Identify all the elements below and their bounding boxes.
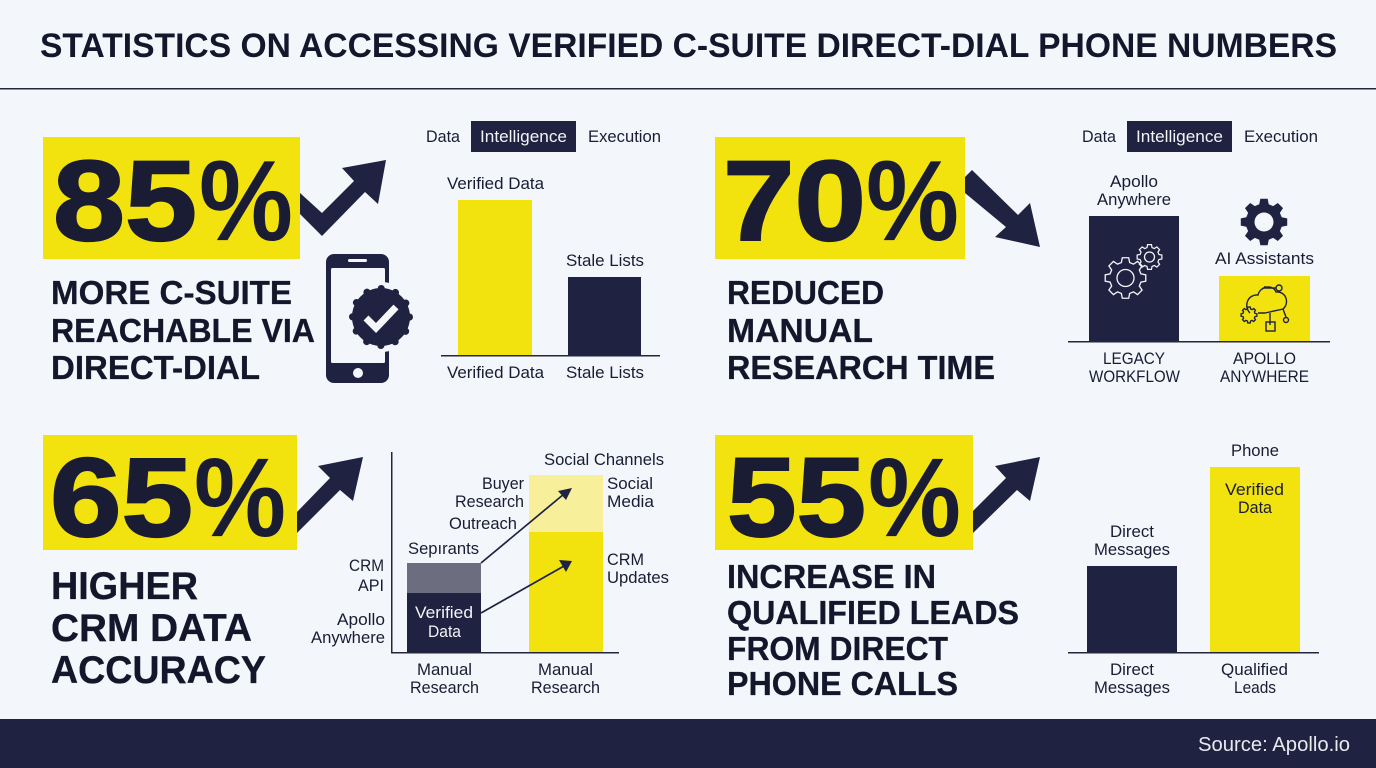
stat: 55%	[715, 435, 973, 560]
stat: 70%	[715, 137, 965, 265]
tabs: data intelligence execution	[426, 121, 661, 152]
tabs: data intelligence execution	[1082, 121, 1318, 152]
panel: 65% higher CRM data accuracy	[43, 435, 669, 697]
heading: more C-suite reachable: MORE C-SUITE	[51, 274, 292, 311]
stat: 55%: 55	[727, 435, 866, 560]
stacked bar chart: manual research comparison: Social Channels	[544, 450, 664, 469]
bar chart: direct messages vs phone: Messages	[1094, 540, 1170, 559]
bar chart: direct messages vs phone: Messages	[1094, 678, 1170, 697]
arrow: to social media	[481, 488, 572, 563]
stacked bar chart: manual research comparison: Manual	[417, 660, 472, 679]
stacked bar chart: manual research comparison	[311, 450, 669, 697]
stat: 65%: 65	[50, 435, 193, 560]
tabs: data intelligence execution: Data	[1082, 127, 1117, 146]
stacked bar chart: manual research comparison: Data	[428, 622, 461, 641]
stacked bar chart: manual research comparison: Research	[410, 678, 479, 697]
bar chart: verified data vs stale lists: Verified Data	[447, 363, 545, 382]
stacked bar chart: manual research comparison: CRM	[607, 550, 644, 569]
stacked bar chart: manual research comparison: Research	[455, 492, 524, 511]
stat: 85%	[43, 137, 300, 265]
stat: 70%: %	[866, 138, 959, 265]
bar chart: direct messages vs phone: Leads	[1234, 678, 1276, 697]
title: STATISTICS ON ACCESSING VERIFIED C-SUITE DIRECT-DIAL PHONE NUMBERS	[40, 27, 1337, 65]
stacked bar chart: manual research comparison: Outreach	[449, 514, 517, 533]
tabs: data intelligence execution: Intelligence	[480, 127, 567, 146]
stacked bar chart: manual research comparison: Research	[531, 678, 600, 697]
arrow: up trend	[300, 160, 386, 236]
stacked bar chart: manual research comparison: Media	[607, 492, 655, 511]
bar chart: direct messages vs phone: Verified	[1225, 480, 1284, 499]
bar chart: verified data vs stale lists: Stale Lists	[566, 363, 644, 382]
arrow: up	[973, 457, 1040, 533]
stacked bar chart: manual research comparison: API	[358, 576, 384, 595]
tabs: data intelligence execution: Execution	[588, 127, 661, 146]
bar chart: legacy workflow vs Apollo Anywhere: WORKFLOW	[1089, 367, 1180, 386]
tabs: data intelligence execution: Execution	[1244, 127, 1318, 146]
heading: increase in qualified leads: INCREASE IN	[727, 558, 936, 595]
panel: 85% more C-suite reachable	[43, 121, 661, 386]
tabs: data intelligence execution: Intelligence	[1136, 127, 1223, 146]
stat: 70%: 70	[723, 138, 866, 265]
stacked bar chart: manual research comparison: CRM	[349, 556, 384, 575]
stacked bar chart: manual research comparison: Manual	[538, 660, 593, 679]
stacked bar chart: manual research comparison: Social	[607, 474, 653, 493]
stacked bar chart: manual research comparison: Sepırants	[408, 539, 479, 558]
heading: increase in qualified leads: PHONE CALLS	[727, 665, 958, 702]
stat: 85%: 85	[53, 138, 197, 265]
bar chart: legacy workflow vs Apollo Anywhere: ANYWHERE	[1220, 367, 1309, 386]
heading: higher CRM data accuracy: ACCURACY	[51, 649, 266, 692]
heading: increase in qualified leads: FROM DIRECT	[727, 630, 948, 667]
bar chart: direct messages vs phone: Direct	[1110, 660, 1154, 679]
bar chart: verified data vs stale lists: Stale Lists	[566, 251, 644, 270]
bar chart: legacy workflow vs Apollo Anywhere	[1068, 172, 1330, 386]
bar chart: verified data vs stale lists: Verified Data	[447, 174, 545, 193]
bar chart: legacy workflow vs Apollo Anywhere: LEGACY	[1103, 349, 1165, 368]
panel: 55% increase in qualified leads	[715, 435, 1319, 702]
heading: increase in qualified leads	[727, 558, 1019, 702]
stacked bar chart: manual research comparison: Verified	[415, 603, 473, 622]
bar chart: direct messages vs phone: Qualified	[1221, 660, 1288, 679]
bar chart: verified data vs stale lists	[441, 174, 660, 382]
heading: reduced manual research time: RESEARCH TIME	[727, 349, 995, 386]
icon: phone with verified badge	[326, 254, 416, 383]
stat: 55%: %	[868, 435, 961, 560]
arrow: to CRM updates	[481, 560, 572, 613]
heading: more C-suite reachable: REACHABLE VIA	[51, 312, 315, 349]
heading: reduced manual research time: REDUCED	[727, 274, 884, 311]
bar chart: legacy workflow vs Apollo Anywhere: Anywhere	[1097, 190, 1171, 209]
heading: higher CRM data accuracy	[51, 565, 266, 692]
stat: 65%	[43, 435, 297, 560]
heading: reduced manual research time: MANUAL	[727, 312, 873, 349]
tabs: data intelligence execution: Data	[426, 127, 461, 146]
arrow: up	[297, 457, 363, 533]
footer: source: Source: Apollo.io	[1198, 734, 1350, 756]
stat: 85%: %	[199, 138, 293, 265]
stat: 65%: %	[194, 435, 286, 560]
bar chart: legacy workflow vs Apollo Anywhere: APOLLO	[1233, 349, 1296, 368]
bar chart: legacy workflow vs Apollo Anywhere: AI Assistants	[1215, 249, 1314, 268]
icon: cloud network	[1241, 285, 1288, 331]
stacked bar chart: manual research comparison: Apollo	[337, 610, 385, 629]
bar chart: direct messages vs phone: Phone	[1231, 441, 1279, 460]
heading: more C-suite reachable: DIRECT-DIAL	[51, 349, 260, 386]
bar chart: direct messages vs phone: Direct	[1110, 522, 1154, 541]
stacked bar chart: manual research comparison: Anywhere	[311, 628, 385, 647]
bar chart: direct messages vs phone	[1068, 441, 1319, 697]
heading: higher CRM data accuracy: CRM DATA	[51, 607, 252, 650]
bar chart: legacy workflow vs Apollo Anywhere: Apollo	[1110, 172, 1158, 191]
heading: more C-suite reachable	[51, 274, 315, 386]
heading: increase in qualified leads: QUALIFIED LEADS	[727, 594, 1019, 631]
heading: higher CRM data accuracy: HIGHER	[51, 565, 198, 608]
stacked bar chart: manual research comparison: Buyer	[482, 474, 524, 493]
heading: reduced manual research time	[727, 274, 995, 386]
icon: solid gear	[1241, 199, 1287, 245]
stacked bar chart: manual research comparison: Updates	[607, 568, 669, 587]
bar chart: direct messages vs phone: Data	[1238, 498, 1273, 517]
icon: outlined gears	[1105, 245, 1162, 298]
arrow: down trend	[965, 170, 1040, 247]
footer: source	[0, 719, 1376, 768]
